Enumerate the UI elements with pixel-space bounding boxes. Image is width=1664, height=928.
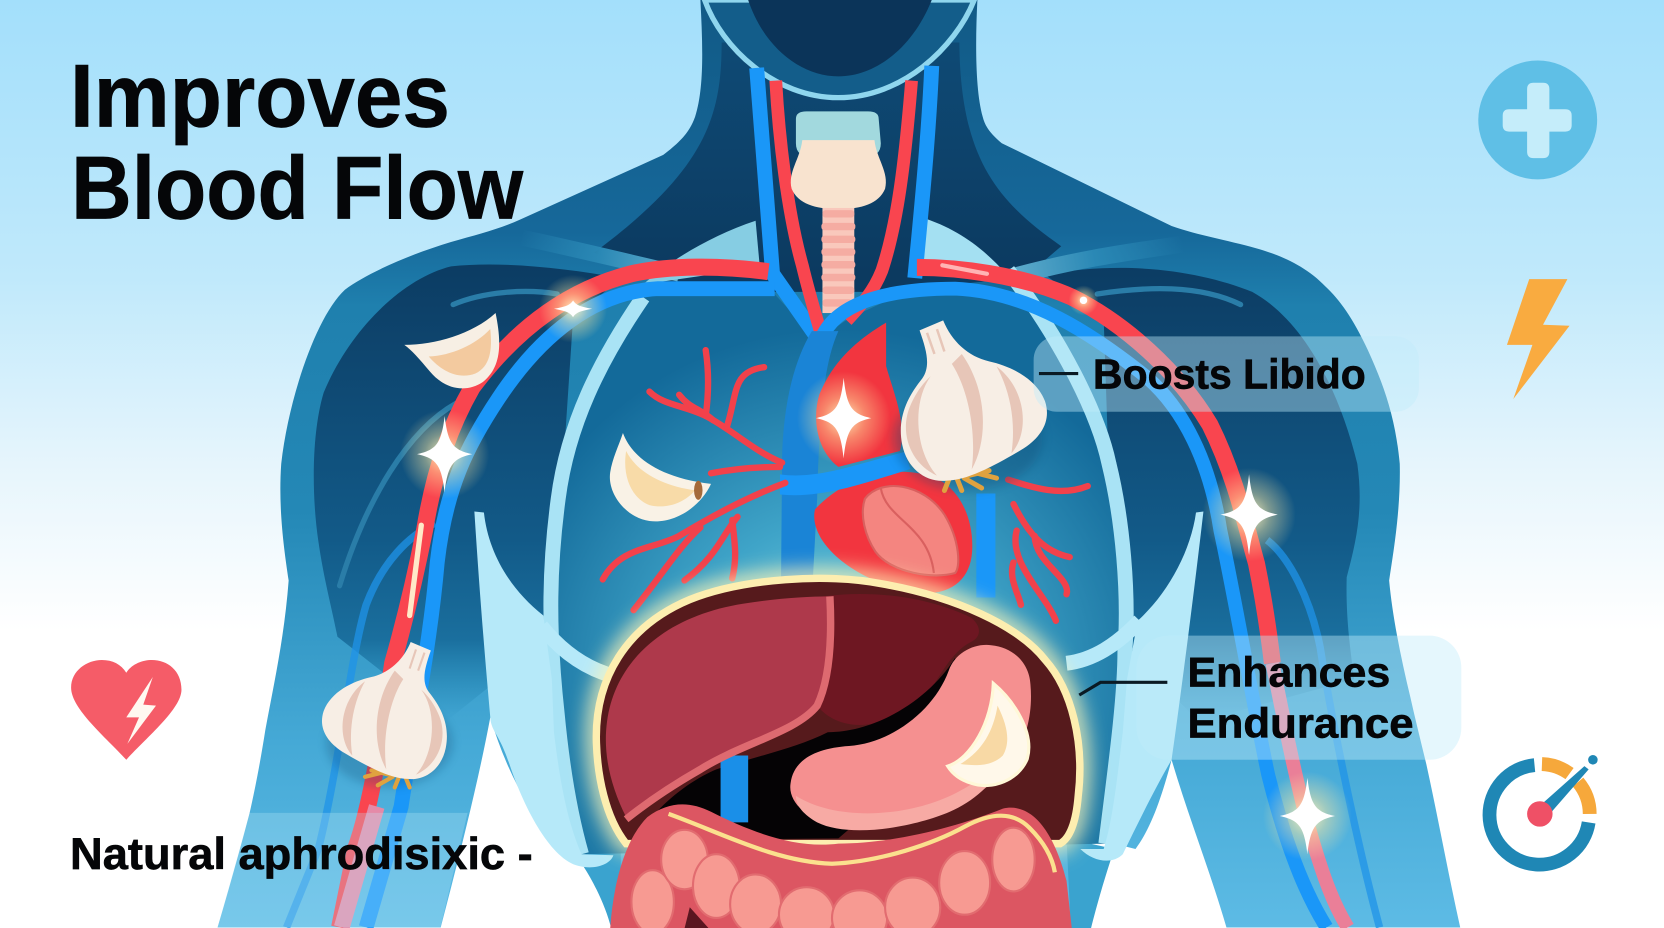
icon: performance gauge — [1489, 755, 1598, 865]
callout: boosts libido — [1034, 336, 1419, 412]
clove inner — [960, 706, 1007, 765]
shadow — [326, 698, 453, 787]
lower right torso strip — [1067, 838, 1114, 928]
blue band across heart — [780, 452, 911, 495]
ribcage fill — [551, 278, 1126, 854]
left collar band — [522, 238, 679, 274]
head and jaw — [705, 0, 974, 98]
right secondary vein — [1267, 540, 1380, 927]
upper chest dark area — [594, 42, 1061, 292]
shadow — [893, 386, 1042, 491]
sparkle: heart — [797, 371, 890, 465]
bulb — [901, 320, 1047, 481]
right upper arm inner — [1045, 268, 1360, 722]
roots — [365, 770, 410, 787]
callout: enhances endurance: Endurance — [1188, 701, 1414, 747]
garlic clove in stomach — [948, 683, 1029, 786]
callout band: natural aphrodisiac — [218, 812, 468, 928]
ribcage outline right — [1008, 271, 1126, 844]
bulb stripes — [906, 376, 937, 476]
gauge blue arc — [1489, 765, 1589, 865]
stomach — [790, 645, 1031, 829]
left arm muscle line — [340, 403, 456, 586]
right blue column — [977, 493, 995, 597]
trachea rings — [821, 208, 855, 313]
title: Blood Flow — [71, 138, 524, 238]
sparkle: right shoulder small — [1069, 285, 1098, 315]
garlic bulb lower left — [322, 642, 453, 787]
larynx top — [796, 111, 881, 157]
left secondary vein — [287, 523, 435, 927]
sparkle: left arm — [400, 410, 489, 499]
left neck blue vessel — [757, 68, 817, 337]
organ capsule — [596, 578, 1080, 844]
larynx body — [791, 140, 886, 209]
right rib wedge — [1080, 511, 1203, 861]
icon: medical plus — [1478, 60, 1597, 179]
icon: lightning bolt — [1507, 279, 1570, 399]
heart chamber — [863, 486, 958, 575]
stomach lower band — [796, 738, 1013, 830]
blue central column — [781, 331, 838, 578]
central heart and vessels — [780, 323, 986, 597]
left blue artery — [366, 289, 775, 927]
left lower faded artery — [342, 806, 377, 927]
ribcage outline left — [551, 297, 643, 854]
left lung red branches — [603, 350, 785, 610]
callout: enhances endurance — [1079, 636, 1461, 760]
sparkle: right forearm — [1263, 771, 1352, 861]
clove tip — [694, 481, 703, 500]
garlic clove upper left — [404, 313, 499, 388]
intestines — [610, 804, 1072, 928]
jaw outer — [705, 0, 974, 98]
right muscle line — [1097, 289, 1241, 305]
intestine yellow line — [669, 814, 1055, 872]
title: Improves — [70, 45, 450, 145]
garlic clove centre — [610, 433, 711, 521]
roots — [944, 471, 997, 491]
right neck red vessel — [847, 81, 912, 320]
trachea and larynx — [791, 111, 886, 313]
white gap left of torso — [440, 717, 616, 928]
left neck red vessel — [776, 81, 820, 331]
right lung top highlight — [919, 218, 1006, 274]
blue vein in abdomen — [721, 756, 747, 822]
capsule body — [596, 578, 1080, 844]
liver rim — [626, 596, 831, 819]
heart chamber line — [881, 488, 934, 573]
callout: boosts libido: Boosts Libido — [1093, 351, 1366, 397]
lower left torso strip — [570, 838, 621, 928]
right red artery — [917, 267, 1272, 663]
sparkle: right arm — [1202, 468, 1296, 561]
sparkle: left shoulder — [539, 275, 607, 343]
clove inner — [625, 451, 695, 506]
heart body — [814, 472, 972, 593]
bulb stripes — [416, 690, 443, 775]
clove inner — [429, 329, 491, 376]
right neck blue vessel — [915, 66, 932, 278]
left red artery — [340, 267, 768, 927]
left arm highlight — [410, 525, 421, 615]
black gap — [637, 658, 960, 840]
red aorta — [816, 323, 902, 467]
upper right lobe — [817, 594, 979, 725]
right collar band — [1008, 244, 1183, 278]
right blue artery — [819, 289, 1327, 927]
human torso illustration — [218, 0, 1460, 928]
left diaphragm arc — [541, 626, 613, 676]
gauge orange arc — [1542, 764, 1590, 814]
bulb — [322, 642, 447, 779]
gauge hub — [1527, 801, 1553, 827]
left lung top highlight — [643, 221, 760, 284]
intestine lumps — [631, 828, 1035, 928]
white gap right of torso — [1072, 760, 1227, 928]
title — [70, 45, 524, 238]
icon: heart with bolt — [71, 660, 181, 760]
label: natural aphrodisixic: Natural aphrodisixic - — [70, 830, 533, 879]
right arch highlight — [942, 265, 987, 274]
callout: enhances endurance: Enhances — [1188, 650, 1390, 696]
right lower faded artery — [1272, 663, 1348, 927]
neck blood vessels — [757, 66, 932, 337]
needle dot — [1588, 755, 1598, 765]
right diaphragm arc — [1067, 621, 1140, 663]
capsule glow — [596, 578, 1080, 844]
intestine base — [610, 804, 1072, 928]
liver — [606, 596, 831, 817]
left upper arm inner — [314, 264, 621, 722]
garlic bulb centre right — [893, 320, 1047, 491]
left muscle line — [453, 291, 557, 305]
intestine dark fold — [684, 907, 709, 928]
body silhouette — [218, 0, 1460, 927]
right lung red branches — [1008, 480, 1088, 621]
jaw inner — [748, 0, 932, 76]
arterial and venous arches — [287, 265, 1380, 927]
left rib wedge — [474, 511, 613, 867]
gauge needle — [1537, 766, 1589, 819]
